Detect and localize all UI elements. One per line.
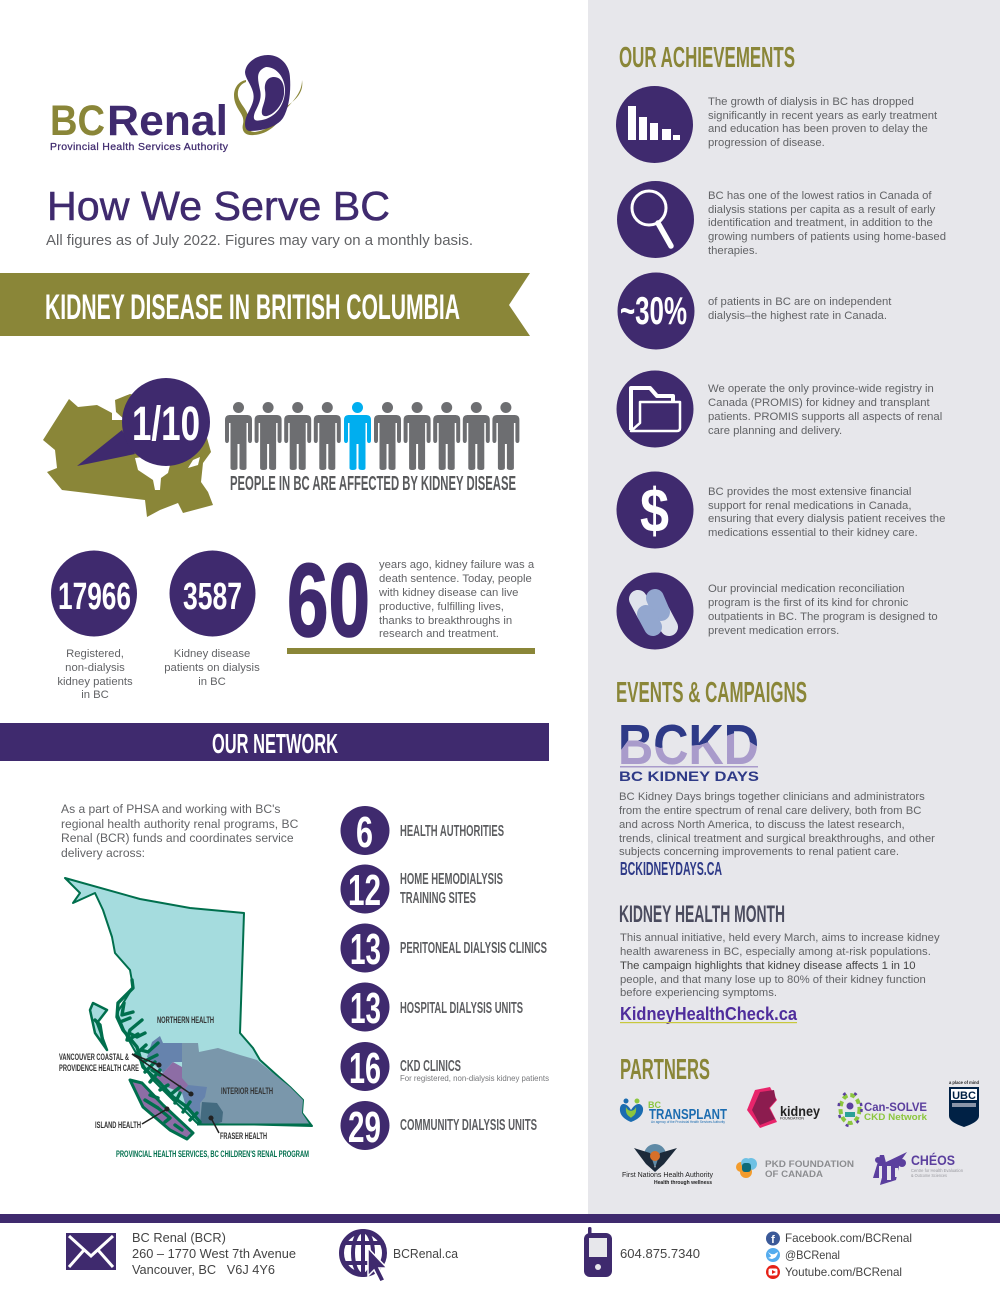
footer: address: Vancouver, BC V6J 4Y6 — [132, 1262, 275, 1277]
stat: 3587: in BC — [198, 676, 226, 688]
logo: BC Kidney Days — [620, 724, 758, 781]
logo: First Nations Health Authority: Health through wellness — [654, 1180, 712, 1186]
logo: PKD Foundation of Canada: OF CANADA — [765, 1169, 823, 1180]
map: BC health authorities: NORTHERN HEALTH — [157, 1015, 214, 1025]
achievement: ~30% independent dialysis — [618, 272, 892, 350]
achievement: ~30% independent dialysis: dialysis–the highest rate in Canada. — [708, 310, 887, 322]
stat: 12 home hemodialysis training sites: 12 — [348, 866, 381, 915]
stat: 6 health authorities: 6 — [356, 808, 373, 857]
stat: 12 home hemodialysis training sites: HOME HEMODIALYSIS — [400, 871, 503, 888]
logo: CHEOS: Centre for Health Evaluation — [911, 1168, 963, 1173]
logo: BC Kidney Days: BC KIDNEY DAYS — [619, 768, 759, 784]
banner: kidney disease in British Columbia — [0, 273, 530, 336]
logo: BC Kidney Days: BCKD — [618, 713, 759, 777]
achievement: dialysis stations: therapies. — [708, 245, 758, 257]
stat: 60 years: death sentence. Today, people — [379, 573, 532, 585]
map: Canada with 1/10 callout — [43, 378, 213, 517]
stat: 60 years: with kidney disease can live — [378, 587, 518, 599]
text: BC Kidney Days — [619, 791, 935, 858]
logo: CHEOS — [873, 1152, 963, 1185]
footer: address — [66, 1230, 296, 1277]
logo: UBC — [949, 1080, 979, 1127]
stat: 6 health authorities — [340, 806, 504, 857]
map: BC health authorities: VANCOUVER COASTAL & — [59, 1052, 129, 1062]
achievement: medication reconciliation — [616, 572, 938, 650]
heading: partners: PARTNERS — [620, 1054, 710, 1086]
stat: 13 peritoneal dialysis clinics: PERITONEAL DIALYSIS CLINICS — [400, 940, 547, 957]
logo: CHEOS: CHÉOS — [911, 1152, 955, 1168]
stat: 3587: 3587 — [183, 576, 242, 618]
achievement: dialysis growth: and education has been proven to delay the — [708, 123, 928, 135]
achievement: ~30% independent dialysis: of patients in BC are on independent — [708, 296, 892, 308]
achievement: financial support: BC provides the most extensive financial — [708, 486, 911, 498]
text: kidney health month: health awareness in BC, especially among at-risk populations. — [620, 946, 931, 958]
achievement: dialysis growth: progression of disease. — [708, 137, 825, 149]
stat: 6 health authorities: HEALTH AUTHORITIES — [400, 823, 504, 840]
text: network intro: delivery across: — [61, 846, 145, 860]
logo: BC Renal: Provincial Health Services Authority — [50, 141, 229, 153]
text: network intro — [61, 802, 299, 860]
text: kidney health month: This annual initiative, held every March, aims to increase kidney — [620, 932, 940, 944]
logo: BC Transplant — [620, 1098, 727, 1124]
stat: 3587: patients on dialysis — [164, 662, 260, 674]
achievement: PROMIS registry: patients. PROMIS supports all aspects of renal — [708, 411, 942, 423]
text: kidney health month: before experiencing symptoms. — [620, 987, 777, 999]
achievement: financial support: $ — [640, 477, 669, 546]
stat: 13 hospital dialysis units: HOSPITAL DIALYSIS UNITS — [400, 1000, 523, 1017]
stat: 16 CKD clinics: CKD CLINICS — [400, 1058, 461, 1075]
stat: 17966: Registered, — [66, 648, 124, 660]
map: BC health authorities: FRASER HEALTH — [220, 1131, 267, 1141]
achievement: financial support — [616, 472, 945, 548]
logo: BC Kidney Days: BCKD — [618, 713, 759, 777]
footer bar — [0, 1214, 1000, 1223]
text: kidney health month — [620, 932, 940, 999]
banner: kidney disease in British Columbia: KIDNEY DISEASE IN BRITISH COLUMBIA — [45, 288, 460, 327]
footer: phone — [584, 1227, 700, 1277]
text: BC Kidney Days: trends, clinical treatment and surgical breakthroughs, and other — [619, 833, 935, 845]
stat: 60 years: productive, fulfilling lives, — [379, 601, 504, 613]
achievement: dialysis growth: The growth of dialysis in BC has dropped — [708, 96, 914, 108]
subtitle: All figures as of July 2022. Figures may vary on a monthly basis. — [46, 233, 473, 249]
achievement: financial support: ensuring that every dialysis patient receives the — [708, 513, 945, 525]
stat: 17966: kidney patients — [57, 676, 133, 688]
logo: First Nations Health Authority — [622, 1144, 713, 1186]
achievement: medication reconciliation: outpatients in BC. The program is designed to — [708, 611, 938, 623]
caption: people affected: PEOPLE IN BC ARE AFFECTED BY KIDNEY DISEASE — [230, 473, 516, 495]
achievement: PROMIS registry: Canada (PROMIS) for kidney and transplant — [708, 397, 931, 409]
map: BC health authorities — [59, 878, 312, 1159]
stat: 29 community dialysis units: COMMUNITY DIALYSIS UNITS — [400, 1117, 537, 1134]
footer: address: BC Renal (BCR) — [132, 1230, 226, 1245]
logo: BC Renal: Renal — [107, 97, 228, 145]
stat: 17966: non-dialysis — [65, 662, 125, 674]
stat: 13 hospital dialysis units: 13 — [350, 984, 381, 1033]
heading: our achievements: OUR ACHIEVEMENTS — [619, 42, 795, 74]
map: BC health authorities: INTERIOR HEALTH — [221, 1086, 273, 1096]
achievement: ~30% independent dialysis: ~30% — [620, 290, 687, 333]
logo: PKD Foundation of Canada — [736, 1158, 854, 1180]
logo: UBC: a place of mind — [949, 1080, 979, 1085]
text: network intro: As a part of PHSA and working with BC's — [61, 802, 280, 816]
achievement: PROMIS registry: We operate the only province-wide registry in — [708, 383, 934, 395]
text: BC Kidney Days: subjects concerning improvements to renal patient care. — [619, 846, 899, 858]
stat: 17966 — [51, 550, 137, 701]
logo: BC Renal — [50, 55, 302, 153]
logo: BC Renal: BC — [50, 97, 105, 145]
logo: PKD Foundation of Canada: PKD FOUNDATION — [765, 1159, 854, 1170]
stat: 29 community dialysis units — [340, 1101, 537, 1152]
achievement: financial support: support for renal medications in Canada, — [708, 500, 911, 512]
logo: Can-SOLVE CKD Network: CKD Network — [864, 1112, 928, 1122]
text: kidney health month: The campaign highlights that kidney disease affects 1 in 10 — [620, 960, 916, 972]
logo: Kidney Foundation — [747, 1087, 820, 1128]
stat: 17966: in BC — [81, 689, 109, 701]
stat: 60 years: thanks to breakthroughs in — [379, 615, 512, 627]
achievement: financial support: medications essential to their kidney care. — [708, 527, 918, 539]
achievement: dialysis stations: growing numbers of patients using home-based — [708, 231, 946, 243]
stat: 13 peritoneal dialysis clinics: 13 — [350, 925, 381, 974]
text: network intro: Renal (BCR) funds and coordinates service — [61, 831, 294, 845]
map: Canada with 1/10 callout: 1/10 — [132, 398, 200, 451]
achievement: medication reconciliation: prevent medication errors. — [708, 625, 839, 637]
map: BC health authorities: PROVIDENCE HEALTH CARE — [59, 1063, 139, 1073]
map: BC health authorities: ISLAND HEALTH — [95, 1120, 141, 1130]
logo: Kidney Foundation: kidney — [780, 1104, 820, 1119]
text: BC Kidney Days: BC Kidney Days brings together clinicians and administrators — [619, 791, 925, 803]
logo: BC Transplant: An agency of the Provincial Health Services Authority — [651, 1120, 725, 1124]
footer: social links: f — [771, 1234, 775, 1246]
footer: social links: Youtube.com/BCRenal — [785, 1265, 902, 1279]
text: network intro: regional health authority renal programs, BC — [61, 817, 299, 831]
stat: 12 home hemodialysis training sites — [340, 864, 503, 915]
banner: our network — [0, 723, 549, 761]
logo: BC Transplant: TRANSPLANT — [649, 1106, 727, 1123]
banner: our network: OUR NETWORK — [212, 728, 338, 759]
stat: 60 years — [287, 543, 535, 659]
achievement: dialysis stations: BC has one of the lowest ratios in Canada of — [708, 190, 932, 202]
link: KidneyHealthCheck: KidneyHealthCheck.ca — [620, 1004, 798, 1024]
footer: website: BCRenal.ca — [393, 1246, 459, 1261]
stat: 60 years: years ago, kidney failure was a — [379, 559, 535, 571]
logo: Kidney Foundation: FOUNDATION — [780, 1116, 804, 1120]
panel: right column background — [588, 0, 1000, 1214]
footer: social links: Facebook.com/BCRenal — [785, 1231, 912, 1245]
heading: kidney health month: KIDNEY HEALTH MONTH — [619, 901, 785, 928]
logo: UBC: UBC — [952, 1090, 976, 1102]
logo: First Nations Health Authority: First Nations Health Authority — [622, 1172, 713, 1179]
footer: social links — [766, 1231, 912, 1279]
stat: 12 home hemodialysis training sites: TRAINING SITES — [400, 890, 476, 907]
achievement: medication reconciliation: program is the first of its kind for chronic — [708, 597, 909, 609]
stat: 17966: 17966 — [58, 576, 131, 618]
stat: 60 years: 60 — [287, 543, 370, 659]
stat: 60 years: research and treatment. — [379, 628, 499, 640]
stat: 13 hospital dialysis units — [340, 982, 523, 1033]
achievement: dialysis stations: identification and treatment, in addition to the — [708, 217, 933, 229]
stat: 3587 — [164, 550, 260, 688]
achievement: PROMIS registry: care planning and delivery. — [708, 425, 842, 437]
text: BC Kidney Days: and across North America, to discuss the latest research, — [619, 819, 905, 831]
logo: CHEOS: & Outcome Sciences — [911, 1173, 948, 1178]
stat: 13 peritoneal dialysis clinics — [340, 924, 547, 974]
logo: Can-SOLVE CKD Network: Can-SOLVE — [864, 1100, 927, 1114]
achievement: dialysis stations: dialysis stations per capita as a result of early — [708, 204, 936, 216]
achievement: dialysis growth: significantly in recent years as early treatment — [708, 110, 938, 122]
pictogram: ten people, one highlighted — [225, 402, 519, 470]
text: BC Kidney Days: from the entire spectrum of renal care delivery, both from BC — [619, 805, 921, 817]
map: BC health authorities: PROVINCIAL HEALTH SERVICES, BC CHILDREN'S RENAL PROGRAM — [116, 1149, 309, 1159]
achievement: PROMIS registry — [616, 370, 942, 448]
stat: 3587: Kidney disease — [174, 648, 250, 660]
logo: BC Transplant: BC — [648, 1100, 661, 1110]
stat: 16 CKD clinics: For registered, non-dialysis kidney patients — [400, 1074, 549, 1083]
footer: phone: 604.875.7340 — [620, 1246, 700, 1261]
link: BC Kidney Days site: BCKIDNEYDAYS.CA — [620, 859, 722, 879]
footer: website — [342, 1231, 459, 1282]
footer: social links: @BCRenal — [785, 1248, 840, 1262]
achievement: dialysis growth — [616, 86, 938, 163]
achievement: medication reconciliation: Our provincial medication reconciliation — [708, 583, 905, 595]
text: kidney health month: people, and that many lose up to 80% of their kidney function — [620, 974, 926, 986]
heading: events and campaigns: EVENTS & CAMPAIGNS — [616, 677, 807, 709]
logo: Can-SOLVE CKD Network — [838, 1092, 928, 1126]
achievement: dialysis stations — [617, 181, 946, 258]
stat: 16 CKD clinics: 16 — [349, 1044, 381, 1093]
stat: 16 CKD clinics — [340, 1042, 549, 1093]
footer: address: 260 – 1770 West 7th Avenue — [132, 1246, 296, 1261]
stat: 29 community dialysis units: 29 — [348, 1103, 381, 1152]
title: How We Serve BC — [47, 183, 390, 229]
